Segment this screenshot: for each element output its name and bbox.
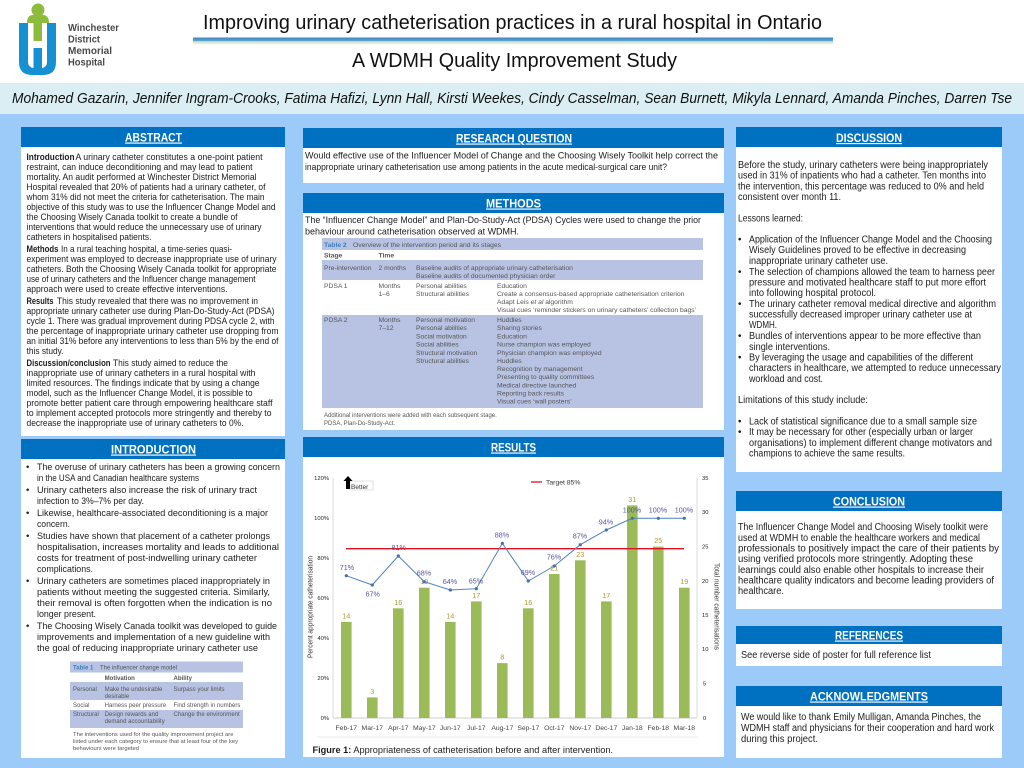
line value labels [340,506,694,598]
abstract text: appropriate urinary catheter use during Plan-Do-Study-Act (PDSA) [26,306,274,316]
table 2: overview of the intervention period: Medical directive launched [497,382,576,390]
discussion text: inappropriate urinary catheter use. [749,256,888,267]
table 1: the influencer change model: Find strength in numbers [174,703,240,709]
table 2: overview of the intervention period: Huddles [497,317,522,324]
heading: abstract: ABSTRACT [125,132,182,144]
introduction bullet list: the goal of reducing inappropriate urinary catheter use [37,643,258,654]
conclusion text [738,522,999,597]
table 1: the influencer change model: desirable [105,694,130,700]
introduction bullet list: complications. [37,564,93,575]
left axis labels: 20% [317,676,329,682]
discussion text: • [738,234,742,246]
left axis labels: 40% [317,636,329,642]
abstract text: use of urinary catheters and the Influencer change management [26,274,256,284]
heading: introduction: INTRODUCTION [111,444,196,456]
discussion text: By leveraging the usage and capabilities of the different [749,352,973,364]
introduction bullet list: • [26,531,29,542]
references text: See reverse side of poster for full reference list [741,650,931,661]
introduction bullet list: • [26,462,29,473]
table 2: overview of the intervention period: Months [378,317,401,324]
bar value labels: 31 [628,495,636,504]
logo: Winchester District Memorial Hospital: Hospital [68,58,105,68]
abstract text: This study aimed to reduce the [113,358,228,368]
bar value labels: 17 [472,591,480,600]
introduction bullet list: • [26,621,29,632]
table 2: overview of the intervention period: Physician champion was employed [497,350,602,357]
month labels: Apr-17 [388,725,409,732]
discussion text: Before the study, urinary catheters were being inappropriately [738,160,988,171]
bar value labels: 16 [394,598,402,607]
introduction bullet list: Urinary catheters also increase the risk of urinary tract [37,485,257,496]
bar value labels: 19 [420,577,428,586]
target line [346,548,684,550]
icon: better arrow: Better [351,484,369,491]
right axis labels: 20 [702,579,708,585]
left axis labels: 60% [317,596,329,602]
heading: acknowledgments: ACKNOWLEDGMENTS [810,692,928,704]
bar value labels: 21 [550,564,558,572]
left axis labels: 100% [314,516,329,522]
abstract text: catheters. Both the Choosing Wisely Canada toolkit for appropriate [26,264,276,274]
abstract text: objective of this study was to use the Influencer Change Model and [26,202,276,212]
table 1: the influencer change model: Social [73,703,89,709]
legend: target 85%: Target 85% [546,480,580,486]
discussion text: • [738,416,742,428]
introduction bullet list: The Choosing Wisely Canada toolkit was developed to guide [37,621,277,632]
bar value labels: 16 [524,598,532,607]
discussion text: Bundles of interventions appear to be more effective than [749,331,981,342]
abstract text: Hospital revealed that 20% of patients had a urinary catheter, of [26,182,266,192]
table 2: overview of the intervention period: Structural motivation [416,350,478,357]
abstract text: restraint, can induce deconditioning and may lead to patient [26,162,253,172]
bar value labels [342,495,688,696]
introduction bullet list: The overuse of urinary catheters has been a growing concern [37,462,280,473]
abstract text: an initial 31% before any interventions to less than 5% by the end of [26,336,279,346]
discussion text: into following hospital protocol. [749,288,876,299]
abstract text: promote better patient care through empowering healthcare staff [26,398,273,408]
introduction bullet list: concern. [37,519,70,530]
abstract text: to implement accepted protocols more stringently and thereby to [26,408,272,418]
discussion text: • [738,331,742,342]
table 2: overview of the intervention period: Additional interventions were added with each subsequent stage. [324,413,497,419]
abstract text: Discussion/conclusion [26,358,111,368]
table 2: overview of the intervention period: Overview of the intervention period and its stages [353,242,502,249]
conclusion text: professionals to positively impact the care of their patients by [738,544,999,554]
table 2: overview of the intervention period: Visual cues ‘wall posters’ [497,398,572,406]
table 2: overview of the intervention period: 7–12 [378,325,394,332]
table 1: the influencer change model: The interventions used for the quality improvement project are [73,732,233,738]
discussion text: Lessons learned: [738,214,803,224]
introduction bullet list: patients without meeting the suggested criteria. Similarly, [37,587,270,598]
table 2: overview of the intervention period: Recognition by management [497,366,583,373]
heading: discussion: DISCUSSION [836,133,902,145]
heading: results: RESULTS [491,442,536,454]
table 2: overview of the intervention period: Personal motivation [416,317,475,324]
table 2: overview of the intervention period: Stage [324,252,343,260]
discussion text: used in 31% of inpatients who had a catheter. Ten months into [738,170,987,182]
introduction bullet list: in the USA and Canadian healthcare systems [37,473,199,484]
right axis title: Total number catheterisations [712,563,722,650]
authors band [0,83,1024,114]
table 2: overview of the intervention period: Table 2 [324,242,347,249]
subtitle: A WDMH Quality Improvement Study [352,49,678,72]
discussion text: successfully decreased improper urinary catheter use at [749,310,972,320]
table 2: overview of the intervention period: Social motivation [416,334,467,340]
discussion text: • [738,267,742,278]
table 2: overview of the intervention period: PDSA 2 [324,317,348,324]
panel: introduction [21,439,285,758]
month labels: Dec-17 [595,725,617,732]
abstract text: experiment was employed to decrease inappropriate use of urinary [26,254,277,264]
discussion text: • [738,352,742,364]
introduction bullet list: Likewise, healthcare-associated deconditioning is a major [37,508,269,519]
month labels: Sep-17 [517,725,539,732]
heading: methods: METHODS [486,198,541,210]
title rule [193,38,833,44]
left axis labels: 120% [314,476,329,482]
line value labels: 64% [443,577,458,586]
chart: appropriateness of catheterisation [306,476,722,737]
month labels: Jul-17 [467,725,486,732]
introduction bullet list: Studies have shown that placement of a catheter prolongs [37,531,270,542]
acknowledgments text: We would like to thank Emily Mulligan, Amanda Pinches, the [741,712,982,723]
month labels: Jun-17 [440,725,461,732]
table 1: the influencer change model: demand accountability [105,719,166,725]
bar value labels: 3 [370,687,374,696]
introduction bullet list: • [26,576,29,587]
abstract text: Methods [26,244,58,254]
table 2: overview of the intervention period: Personal abilities [416,325,467,332]
line value labels: 71% [340,563,355,572]
table 1: the influencer change model: Table 1 [73,666,94,672]
heading: research question: RESEARCH QUESTION [456,134,572,146]
title: Improving urinary catheterisation practices in a rural hospital in Ontario [203,11,822,34]
abstract text: model, such as the Influencer Change Model, it is possible to [26,388,252,398]
discussion text: Limitations of this study include: [738,395,868,406]
discussion text: single interventions. [749,342,830,353]
month labels: Jan-18 [622,725,643,732]
table 2: overview of the intervention period: PDSA, Plan-Do-Study-Act. [324,421,395,427]
table 2: overview of the intervention period: Create a consensus-based appropriate catheterisation criterion [497,291,685,298]
table 1: the influencer change model: Design rewards and [105,712,158,718]
icon: better arrow [344,476,373,491]
discussion text: Wisely Guidelines proved to be effective in decreasing [749,245,966,256]
bar value labels: 25 [654,536,662,545]
research question text: inappropriate urinary catheterisation use among patients in the acute medical-surgical care unit? [305,162,667,173]
table 2: overview of the intervention period: Structural abilities [416,291,470,298]
discussion text: • [738,299,742,310]
table 2: overview of the intervention period: Sharing stories [497,325,542,332]
month labels: Oct-17 [544,725,565,732]
discussion text: • [738,427,742,438]
month labels: Nov-17 [569,725,591,732]
panel: research question [303,128,724,183]
acknowledgments text: WDMH staff and physicians for their cooperation and hard work [741,723,994,734]
right axis labels [702,476,708,722]
left axis labels: 0% [321,716,329,722]
month labels: Feb-18 [648,725,669,732]
month labels: Aug-17 [491,725,513,732]
line value labels: 81% [392,543,406,552]
introduction bullet list: infection to 3%–7% per day. [37,496,144,507]
right axis labels: 25 [702,544,708,550]
panel: results [303,437,724,757]
line: percent appropriate [345,517,686,592]
line value labels: 68% [417,568,432,578]
acknowledgments text: during this project. [741,734,818,745]
conclusion text: healthcare. [738,586,784,597]
month labels [336,725,695,732]
table 2: overview of the intervention period: Visual cues ‘reminder stickers on urinary catheters’ collection bags’ [497,307,697,314]
discussion text: Application of the Influencer Change Model and the Choosing [749,234,992,246]
logo: Winchester District Memorial Hospital: Winchester [68,23,119,34]
panel: abstract [21,127,285,436]
panel: conclusion [736,491,1002,609]
line value labels: 94% [599,518,614,526]
table 2: overview of the intervention period: Pre-intervention [324,265,372,272]
table 2: overview of the intervention period: 2 months [378,265,407,272]
abstract text: Introduction [26,152,75,162]
abstract text: mortality. An audit performed at Winchester District Memorial [26,172,256,182]
introduction bullet list: longer present. [37,609,96,620]
line value labels: 87% [573,532,588,540]
abstract text: interventions that would reduce the unnecessary use of urinary [26,222,262,232]
introduction bullet list: costs for treatment of post-indwelling urinary catheter [37,553,258,564]
right axis labels: 5 [703,682,706,688]
bar value labels: 14 [342,612,350,620]
abstract text: cycle 1. There was gradual improvement during PDSA cycle 2, with [26,316,274,326]
discussion text: WDMH. [749,320,777,331]
table 2: overview of the intervention period: Personal abilities [416,283,467,290]
abstract text: inappropriate use of urinary catheters in a rural hospital with [26,368,256,378]
conclusion text: healthcare quality indicators and become leading providers of [738,576,994,586]
left axis title: Percent appropriate catheterisation [306,556,314,658]
introduction bullet list: • [26,485,29,496]
legend: target 85% [531,480,580,486]
introduction bullet list: improvements and implementation of a new guideline with [37,632,270,643]
line value labels: 76% [547,552,562,562]
abstract text: decrease the inappropriate use of urinary catheters to 0%. [26,418,244,428]
table 1: the influencer change model: Structural [73,712,99,718]
discussion text: organisations) to implement different change motivators and [749,438,992,449]
right axis labels: 10 [702,647,708,653]
abstract text: A urinary catheter constitutes a one-point patient [76,152,263,162]
table 2: overview of the intervention period: Reporting back results [497,390,564,398]
table 2: overview of the intervention period: Adapt Leis et al algorithm [497,299,573,306]
left axis labels [314,476,329,722]
table 2: overview of the intervention period: Huddles [497,358,522,365]
table 1: the influencer change model: listed under each category to ensure that at least four of the key [73,739,238,745]
right axis labels: 30 [702,510,708,516]
line value labels: 100% [623,506,642,514]
table 2: overview of the intervention period: Structural abilities [416,358,470,365]
discussion text: The urinary catheter removal medical directive and algorithm [749,299,996,310]
table 1: the influencer change model: Change the environment [174,712,240,718]
research question text: Would effective use of the Influencer Model of Change and the Choosing Wisely Toolkit help correct the [305,150,718,162]
line value labels: 69% [521,568,536,577]
table 1: the influencer change model: Surpass your limits [174,687,225,693]
introduction bullet list [26,462,280,654]
conclusion text: using verified protocols more stringently. Adopting these [738,554,974,565]
panel: methods [303,193,724,430]
methods text [305,215,702,238]
right axis labels: 0 [703,716,706,722]
discussion text: the intervention, this percentage was reduced to 0% and held [738,182,984,192]
table 1: the influencer change model: behaviours were targeted [73,746,139,752]
month labels: Mar-18 [674,725,695,732]
methods text: behaviour around catheterisation observed at WDMH. [305,226,519,238]
introduction bullet list: hospitalisation, increases mortality and leads to additional [37,542,279,553]
line value labels: 100% [649,506,668,514]
research question text [305,150,718,173]
bars: total number of catheterisations [341,505,690,718]
discussion text: workload and cost. [748,374,823,385]
table 2: overview of the intervention period: Time [378,252,394,260]
introduction bullet list: their removal is often forgotten when the indication is no [37,598,272,609]
discussion text [738,160,1001,460]
table 1: the influencer change model: Make the undesirable [105,687,163,693]
right axis labels: 35 [702,476,708,482]
abstract text: Results [26,296,54,306]
logo: Winchester District Memorial Hospital: Memorial [68,46,112,57]
abstract text: this study. [26,346,64,356]
table 1: the influencer change model: Motivation [105,676,135,682]
table 2: overview of the intervention period: Months [378,283,401,290]
abstract text: the Choosing Wisely Canada toolkit to create a bundle of [26,212,238,222]
table 2: overview of the intervention period: Social abilities [416,342,459,348]
discussion text: pressure and motivated healthcare staff to put more effort [749,278,986,288]
acknowledgments text [741,712,994,745]
bar value labels: 14 [446,612,454,620]
table 2: overview of the intervention period [322,238,703,427]
figure caption: Figure 1: Appropriateness of catheterisation before and after intervention. [312,745,613,756]
bar value labels: 8 [500,653,504,662]
abstract text: This study revealed that there was no improvement in [57,296,258,306]
conclusion text: learnings could also enable other hospitals to increase their [738,565,985,576]
table 2: overview of the intervention period: PDSA 1 [324,283,348,290]
table 1: the influencer change model: Ability [174,676,193,682]
bar value labels: 23 [576,550,584,559]
table 1: the influencer change model: The influencer change model [100,666,177,672]
introduction bullet list: Urinary catheters are sometimes placed inappropriately in [37,576,270,587]
line value labels: 88% [495,530,510,540]
discussion text: consistent over month 11. [738,192,841,203]
table 1: the influencer change model [70,662,243,752]
bar value labels: 17 [602,591,610,600]
table 2: overview of the intervention period: Baseline audits of appropriate urinary catheterisation [416,265,573,272]
abstract text: In a rural teaching hospital, a time-series quasi- [61,244,232,254]
month labels: May-17 [413,725,436,732]
left axis labels: 80% [317,556,329,562]
right axis labels: 15 [702,613,708,619]
line value labels: 65% [469,576,484,586]
discussion text: champions to achieve the same results. [749,448,905,460]
logo: Winchester District Memorial Hospital: District [68,34,101,46]
table 2: overview of the intervention period: Nurse champion was employed [497,342,591,348]
table 2: overview of the intervention period: 1–6 [378,291,390,298]
line value labels: 100% [675,506,694,514]
table 2: overview of the intervention period: Education [497,334,527,340]
month labels: Mar-17 [362,725,383,732]
abstract text: catheters in hospitalised patients. [26,232,152,242]
introduction bullet list: • [26,508,29,519]
abstract text: the percentage of inappropriate urinary catheter use dropping from [26,326,279,336]
conclusion text: The Influencer Change Model and Choosing Wisely toolkit were [738,522,988,533]
discussion text: Lack of statistical significance due to a small sample size [749,416,978,428]
table 2: overview of the intervention period: Presenting to quality committees [497,374,595,381]
panel: references [736,626,1002,666]
month labels: Feb-17 [336,725,357,732]
panel: discussion [736,127,1002,472]
table 2: overview of the intervention period: Baseline audits of documented physician order [416,273,556,280]
heading: references: REFERENCES [835,630,903,642]
heading: conclusion: CONCLUSION [833,496,905,508]
line value labels: 67% [366,590,380,598]
abstract text: whom 31% did not meet the criteria for catheterisation. The main [26,192,264,202]
discussion text: characters in healthcare, we attempted to reduce unnecessary [749,363,1001,374]
conclusion text: used at WDMH to enable the healthcare workers and medical [738,533,980,544]
bar value labels: 19 [680,577,688,586]
abstract text: limited resources. The findings indicate that by using a change [26,378,260,388]
logo: Winchester District Memorial Hospital [19,4,119,75]
table 2: overview of the intervention period: Education [497,283,527,290]
table 1: the influencer change model: Harness peer pressure [105,703,167,709]
abstract text [26,152,279,428]
discussion text: It may be necessary for other (especially urban or larger [749,427,974,438]
methods text: The “Influencer Change Model” and Plan-Do-Study-Act (PDSA) Cycles were used to change the prior [305,215,702,226]
discussion text: The selection of champions allowed the team to harness peer [749,267,996,278]
panel: acknowledgments [736,686,1002,758]
table 1: the influencer change model: Personal [73,687,97,693]
abstract text: approach were used to create effective interventions. [26,284,228,294]
